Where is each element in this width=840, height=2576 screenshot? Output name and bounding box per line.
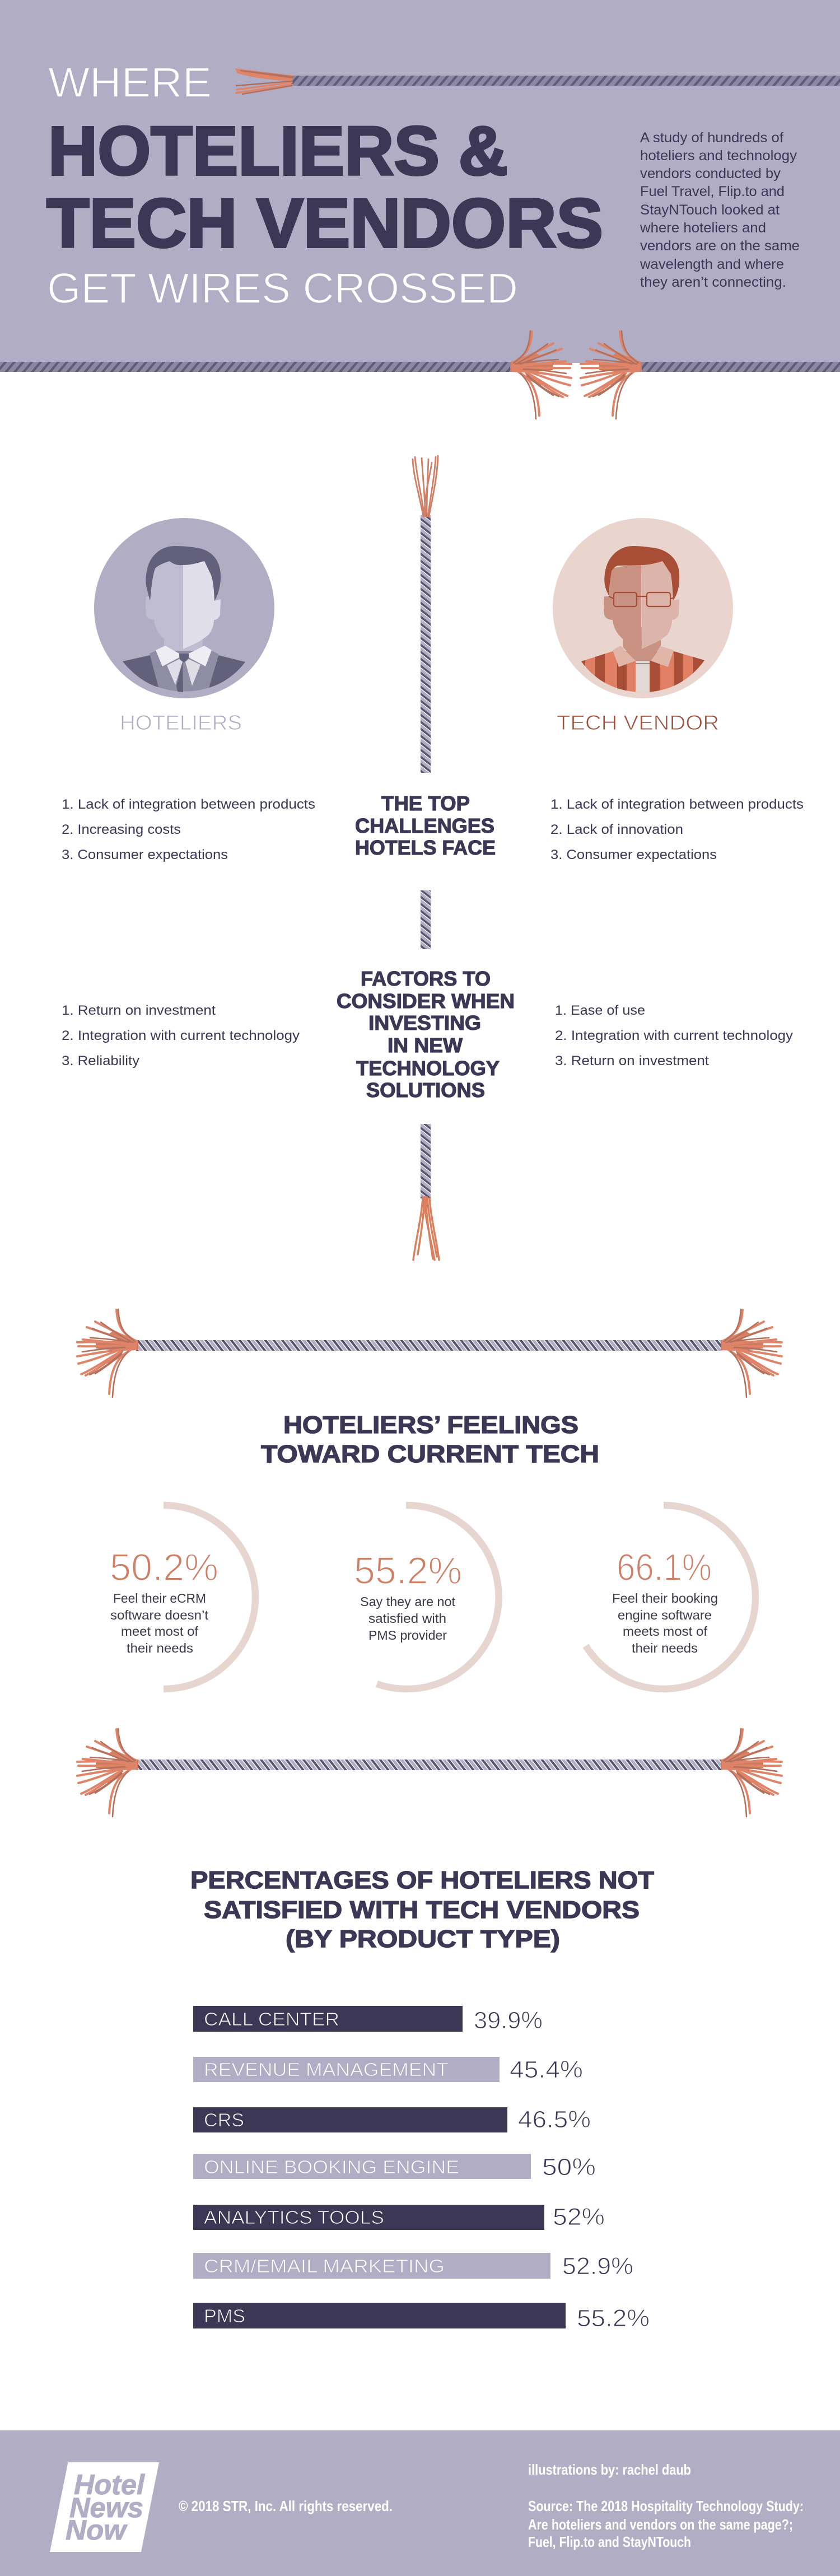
hoteliers suit [123,655,158,687]
bar: crm email marketing: CRM/EMAIL MARKETING [204,2256,445,2276]
arc gauge [586,1505,755,1689]
description: software doesn’t [110,1608,209,1622]
heading: factors to consider: FACTORS TO [361,967,491,990]
bar: analytics tools: ANALYTICS TOOLS [204,2207,384,2228]
list: vendor factors: 3. Return on investment [555,1053,709,1068]
list: vendor factors: 1. Ease of use [555,1003,645,1018]
bar: pms [193,2303,650,2332]
bar: revenue management: REVENUE MANAGEMENT [204,2059,449,2080]
wire divider two [77,1729,782,1817]
title line: get wires crossed: GET WIRES CROSSED [47,265,518,312]
tech vendor avatar [553,518,733,698]
description: their needs [127,1641,193,1655]
description: engine software [618,1608,712,1622]
intro paragraph: wavelength and where [640,256,784,272]
heading: factors to consider: IN NEW [388,1034,463,1057]
heading: factors to consider: CONSIDER WHEN [337,990,515,1012]
intro paragraph: A study of hundreds of [640,130,783,146]
bar: call center: CALL CENTER [204,2009,339,2029]
stat: 50.2 percent [110,1505,255,1689]
title: hoteliers and: HOTELIERS & [48,113,508,190]
bar: crm email marketing: 52.9% [562,2253,633,2280]
description: their needs [632,1641,698,1655]
value: 50.2% [110,1546,218,1589]
vertical wire: middle section [421,890,431,949]
credits and source: Are hoteliers and vendors on the same page?; [528,2516,793,2533]
heading: factors to consider: TECHNOLOGY [356,1057,500,1080]
list: vendor factors [555,1003,793,1068]
heading: hoteliers' feelings: TOWARD CURRENT TECH [261,1440,599,1468]
vendor hair [604,546,679,600]
list: vendor factors: 2. Integration with current technology [555,1028,793,1043]
stat: 66.1 percent [586,1505,755,1689]
heading: factors to consider: INVESTING [368,1011,481,1034]
heading: percentages of hoteliers: SATISFIED WITH TECH VENDORS [204,1896,640,1924]
heading: the top challenges hotels face [355,792,496,859]
intro paragraph [640,130,800,290]
hoteliers collar [156,646,179,666]
bar: crs [193,2106,591,2133]
wire divider one [77,1309,782,1397]
label: hoteliers: HOTELIERS [120,711,242,734]
list: vendor top challenges: 2. Lack of innovation [550,822,683,837]
description: Say they are not [360,1594,456,1609]
intro paragraph: where hoteliers and [640,220,766,236]
bar: pms: 55.2% [577,2305,650,2332]
heading: the top challenges hotels face: HOTELS FACE [355,836,496,859]
bar: crs: CRS [204,2110,244,2130]
bar: revenue management: 45.4% [510,2056,583,2083]
heading: the top challenges hotels face: THE TOP [381,792,470,815]
description: Feel their booking [612,1591,718,1606]
heading: the top challenges hotels face: CHALLENGES [355,814,494,837]
hoteliers shirt [167,659,183,685]
list: vendor top challenges [550,797,804,862]
bar chart [193,2006,650,2332]
intro paragraph: they aren’t connecting. [640,274,786,290]
header bottom wire, broken in the middle [0,331,840,419]
logo: hotel news now [50,2462,159,2552]
vendor face [604,563,661,661]
logo: hotel news now: Now [66,2514,128,2546]
description [612,1591,718,1655]
list: hoteliers factors: 3. Reliability [62,1053,139,1068]
logo: hotel news now: News [69,2492,143,2523]
description: PMS provider [368,1628,447,1642]
description [360,1594,456,1642]
intro paragraph: hoteliers and technology [640,148,797,164]
heading: percentages of hoteliers: PERCENTAGES OF HOTELIERS NOT [190,1866,654,1894]
bar: pms: PMS [204,2306,245,2326]
description: meet most of [121,1624,199,1639]
vertical wire: lower section [413,1124,439,1260]
hoteliers neck [164,633,203,652]
list: hoteliers top challenges: 1. Lack of integration between products [62,797,315,812]
hoteliers hair [146,546,221,601]
bar: revenue management [193,2056,583,2083]
list: vendor top challenges: 1. Lack of integration between products [550,797,804,812]
hoteliers avatar [94,518,274,698]
description: satisfied with [368,1611,446,1626]
label: tech vendor: TECH VENDOR [557,711,719,734]
bar: analytics tools [193,2204,605,2230]
list: hoteliers factors: 1. Return on investment [62,1003,216,1018]
copyright: © 2018 STR, Inc. All rights reserved. [179,2498,393,2514]
list: hoteliers top challenges [62,797,315,862]
description [110,1591,209,1655]
bar: online booking engine: ONLINE BOOKING ENGINE [204,2157,459,2177]
credits and source: Fuel, Flip.to and StayNTouch [528,2533,691,2550]
arc gauge [164,1505,255,1689]
hoteliers tie [176,654,189,692]
vendor glasses [609,592,673,606]
list: hoteliers top challenges: 2. Increasing costs [62,822,181,837]
bar: call center: 39.9% [474,2007,543,2034]
value: 66.1% [617,1546,712,1589]
vertical wire: upper section [413,456,438,773]
heading: factors to consider: SOLUTIONS [366,1079,485,1102]
list: hoteliers factors [62,1003,300,1068]
list: hoteliers top challenges: 3. Consumer expectations [62,847,228,862]
footer panel [0,2430,840,2576]
bar: online booking engine [193,2154,596,2181]
heading: factors to consider [337,967,515,1102]
bar: call center [193,2006,543,2034]
title line: where: WHERE [48,59,212,106]
bar: crs: 46.5% [518,2106,591,2133]
description: Feel their eCRM [113,1591,206,1606]
title: tech vendors: TECH VENDORS [46,185,603,262]
vendor collar [613,646,636,667]
bar: analytics tools: 52% [553,2204,605,2230]
intro paragraph: vendors conducted by [640,166,781,181]
credits and source: illustrations by: rachel daub [528,2461,691,2478]
description: meets most of [623,1624,708,1639]
bar: online booking engine: 50% [542,2154,596,2181]
heading: percentages of hoteliers: (BY PRODUCT TYPE) [286,1925,560,1953]
stat: 55.2 percent [354,1505,499,1689]
header panel [0,0,840,363]
heading: hoteliers' feelings [261,1411,599,1468]
bar: crm email marketing [193,2253,633,2280]
intro paragraph: vendors are on the same [640,238,800,254]
arc gauge [377,1505,499,1689]
value: 55.2% [354,1550,462,1592]
header top wire [235,68,840,94]
heading: hoteliers' feelings: HOTELIERS’ FEELINGS [283,1411,578,1439]
logo: hotel news now: Hotel [74,2469,145,2500]
intro paragraph: StayNTouch looked at [640,202,780,218]
heading: percentages of hoteliers [190,1866,654,1953]
list: vendor top challenges: 3. Consumer expectations [550,847,717,862]
intro paragraph: Fuel Travel, Flip.to and [640,184,785,199]
hoteliers face [146,560,183,652]
vendor shirt [581,651,704,692]
list: hoteliers factors: 2. Integration with current technology [62,1028,300,1043]
credits and source [528,2461,804,2550]
